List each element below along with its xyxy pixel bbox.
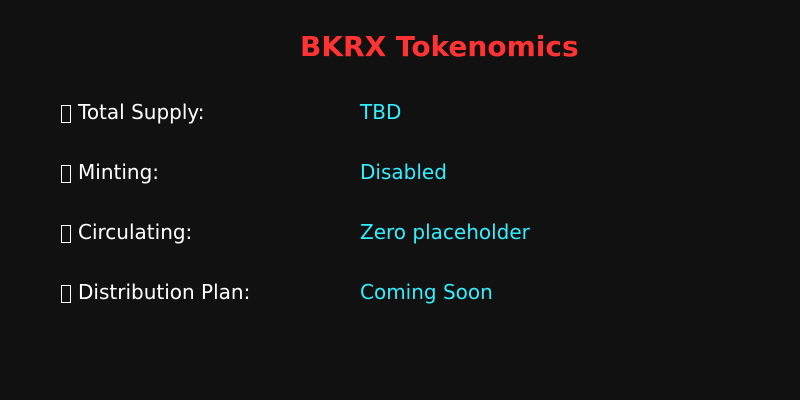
row: minting: Minting: (78, 160, 159, 184)
row: circulating: Zero placeholder (360, 220, 531, 244)
row: minting: Disabled (360, 160, 447, 184)
row: distribution plan (62, 280, 493, 304)
row: total supply: TBD (359, 100, 401, 124)
icon: missing glyph box (62, 106, 70, 122)
icon: missing glyph box (62, 166, 70, 182)
row: total supply: Total Supply: (77, 100, 205, 124)
row: minting (62, 160, 447, 184)
icon: missing glyph box (62, 226, 70, 242)
row: circulating (62, 220, 531, 244)
icon: missing glyph box (62, 286, 70, 302)
row: circulating: Circulating: (78, 220, 192, 244)
title: BKRX Tokenomics (300, 30, 579, 63)
row: distribution plan: Coming Soon (360, 280, 493, 304)
row: distribution plan: Distribution Plan: (78, 280, 250, 304)
row: total supply (62, 100, 401, 124)
